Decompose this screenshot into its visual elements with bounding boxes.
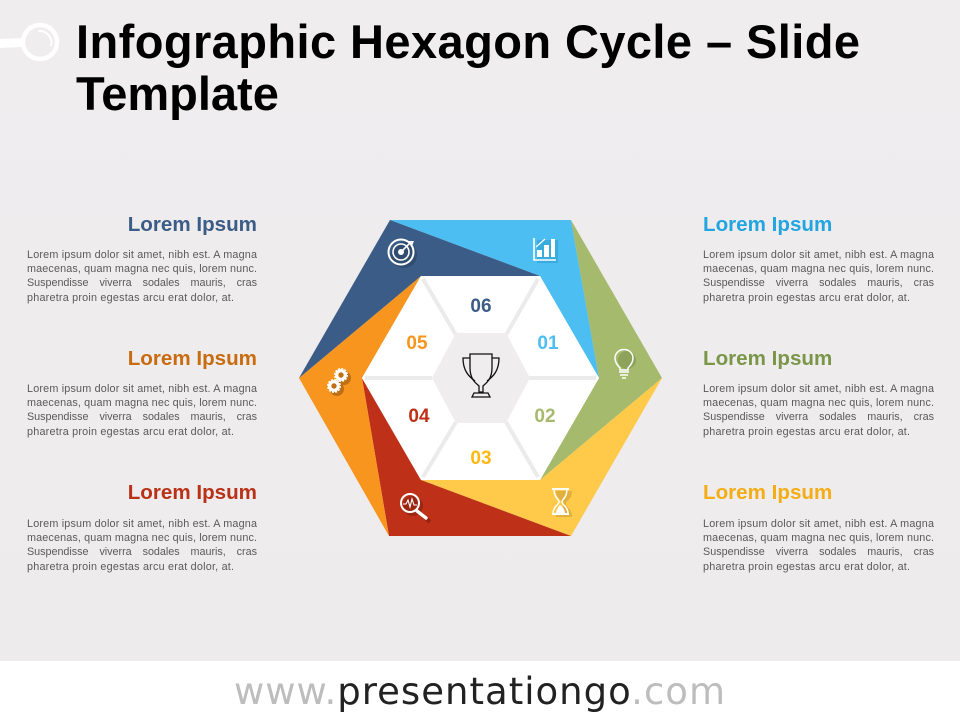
text block: item 01 [703, 213, 935, 304]
text block: item 05: Lorem ipsum dolor sit amet, nibh est. A magna [27, 383, 257, 395]
text block: item 05: Suspendisse viverra sodales mauris, cras [27, 411, 258, 423]
text block: item 06: Lorem ipsum dolor sit amet, nibh est. A magna [27, 249, 257, 261]
segment: orange [299, 276, 421, 536]
number 01: 01 [537, 333, 559, 354]
text block: item 02 [703, 347, 935, 438]
panel: left column text [27, 213, 258, 573]
text block: item 02: Suspendisse viverra sodales mauris, cras [703, 411, 935, 423]
chart: hexagon cycle [299, 220, 662, 536]
text block: item 05: maecenas, quam magna nec quis, lorem nunc. [27, 397, 257, 409]
footer: website url: www.presentationgo.com [234, 670, 725, 713]
text block: item 02: Lorem ipsum dolor sit amet, nibh est. A magna [703, 383, 934, 395]
text block: item 02: Lorem Ipsum [703, 347, 832, 370]
text block: item 02: pharetra proin egestas arcu erat dolor, at. [703, 426, 910, 438]
text block: item 04: Lorem ipsum dolor sit amet, nibh est. A magna [27, 518, 257, 530]
icon: bar chart [534, 238, 558, 263]
inner hexagon [362, 276, 599, 480]
text block: item 03: Suspendisse viverra sodales mauris, cras [703, 546, 935, 558]
icon: gears [328, 369, 351, 396]
segment: green [540, 220, 662, 480]
segment: yellow [421, 378, 662, 536]
text block: item 06: Lorem Ipsum [128, 213, 257, 236]
number 03: 03 [470, 448, 492, 469]
text block: item 04: maecenas, quam magna nec quis, lorem nunc. [27, 532, 257, 544]
text block: item 04: pharetra proin egestas arcu erat dolor, at. [27, 561, 234, 573]
text block: item 05 [27, 347, 258, 438]
text block: item 01: pharetra proin egestas arcu erat dolor, at. [703, 292, 910, 304]
number 02: 02 [534, 406, 556, 427]
text block: item 01: Lorem ipsum dolor sit amet, nibh est. A magna [703, 249, 934, 261]
icon: target [388, 240, 417, 268]
text block: item 03: maecenas, quam magna nec quis, lorem nunc. [703, 532, 934, 544]
segment: red [362, 378, 571, 536]
text block: item 01: Suspendisse viverra sodales mauris, cras [703, 277, 935, 289]
title: Infographic Hexagon Cycle – Slide [76, 15, 860, 68]
text block: item 06: maecenas, quam magna nec quis, lorem nunc. [27, 263, 257, 275]
text block: item 04 [27, 481, 258, 573]
text block: item 06 [27, 213, 258, 304]
panel: right column text [703, 213, 935, 573]
segment: navy [299, 220, 540, 378]
text block: item 03: Lorem Ipsum [703, 481, 832, 504]
text block: item 06: pharetra proin egestas arcu erat dolor, at. [27, 292, 234, 304]
icon: magnifier [401, 494, 430, 522]
segment: light blue [390, 220, 599, 378]
number 04: 04 [408, 406, 430, 427]
title: Template [76, 67, 279, 120]
text block: item 03: Lorem ipsum dolor sit amet, nibh est. A magna [703, 518, 934, 530]
text block: item 01: Lorem Ipsum [703, 213, 832, 236]
text block: item 05: pharetra proin egestas arcu erat dolor, at. [27, 426, 234, 438]
icon: slide pin [0, 25, 57, 59]
text block: item 06: Suspendisse viverra sodales mauris, cras [27, 277, 258, 289]
icon: trophy [463, 354, 499, 397]
text block: item 02: maecenas, quam magna nec quis, lorem nunc. [703, 397, 934, 409]
icon: light bulb [615, 350, 636, 378]
number 05: 05 [406, 333, 428, 354]
icon: hourglass [552, 489, 572, 517]
text block: item 01: maecenas, quam magna nec quis, lorem nunc. [703, 263, 934, 275]
number 06: 06 [470, 296, 492, 317]
text block: item 03: pharetra proin egestas arcu erat dolor, at. [703, 561, 910, 573]
text block: item 04: Suspendisse viverra sodales mauris, cras [27, 546, 258, 558]
text block: item 05: Lorem Ipsum [128, 347, 257, 370]
text block: item 04: Lorem Ipsum [128, 481, 257, 504]
text block: item 03 [703, 481, 935, 573]
